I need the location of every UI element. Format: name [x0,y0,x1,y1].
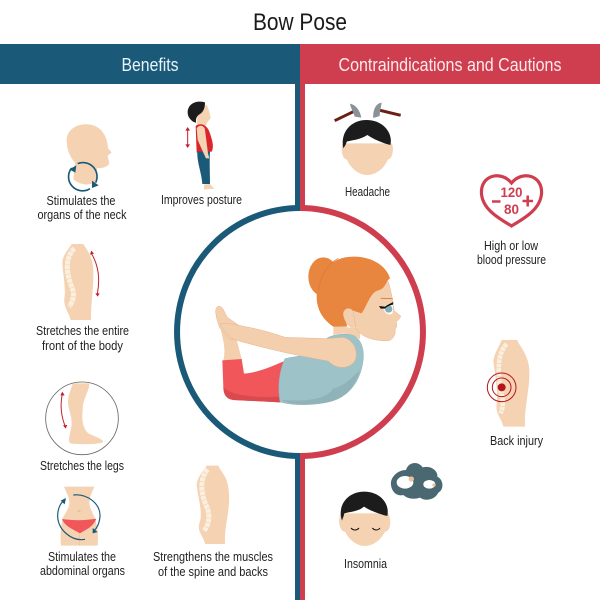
label: spine: of the spine and backs [158,565,268,579]
label: insomnia: Insomnia [344,557,387,571]
illustration: girl in bow pose [216,257,401,405]
icon: heart blood pressure: 80 [504,201,519,217]
icon: standing child posture [185,102,214,189]
panel header: benefits [0,44,300,84]
center divider and ring [177,84,423,600]
label: blood pressure [477,239,546,267]
icon: spine torso with arrow [62,244,100,320]
title: Bow Pose [253,9,347,36]
panel header: benefits: Benefits [122,55,178,75]
label: spine: Strengthens the muscles [153,550,273,564]
icon: heart blood pressure: 120 [500,184,523,200]
label: abdominal: Stimulates the [48,550,116,564]
label: front of body [36,324,129,353]
label: back injury: Back injury [490,434,544,448]
icon: sleeping head with sheep thought cloud [339,463,442,546]
label: front of body: Stretches the entire [36,324,129,338]
label: blood pressure: High or low [484,239,539,253]
icon: spine torso [197,466,229,544]
label: posture: Improves posture [161,193,242,207]
label: abdominal [40,550,125,578]
label: abdominal: abdominal organs [40,564,125,578]
label: headache: Headache [345,185,390,199]
icon: head with neck rotation arrows [67,124,112,191]
icon: heart blood pressure [481,176,542,226]
label: legs: Stretches the legs [40,459,124,473]
panel header: contraindications [300,44,600,84]
icon: abdomen with rotation arrows [58,487,100,546]
label: neck: organs of the neck [38,208,127,222]
panel header: contraindications: Contraindications and Cautions [338,55,562,75]
icon: leg in circle [46,382,118,455]
label: front of body: front of the body [42,339,124,353]
icon: head with hammers [335,103,401,175]
label: neck: Stimulates the [46,194,116,208]
label: spine [153,550,273,579]
label: neck [38,194,127,222]
icon: back with pain target [487,340,529,427]
label: blood pressure: blood pressure [477,253,546,267]
